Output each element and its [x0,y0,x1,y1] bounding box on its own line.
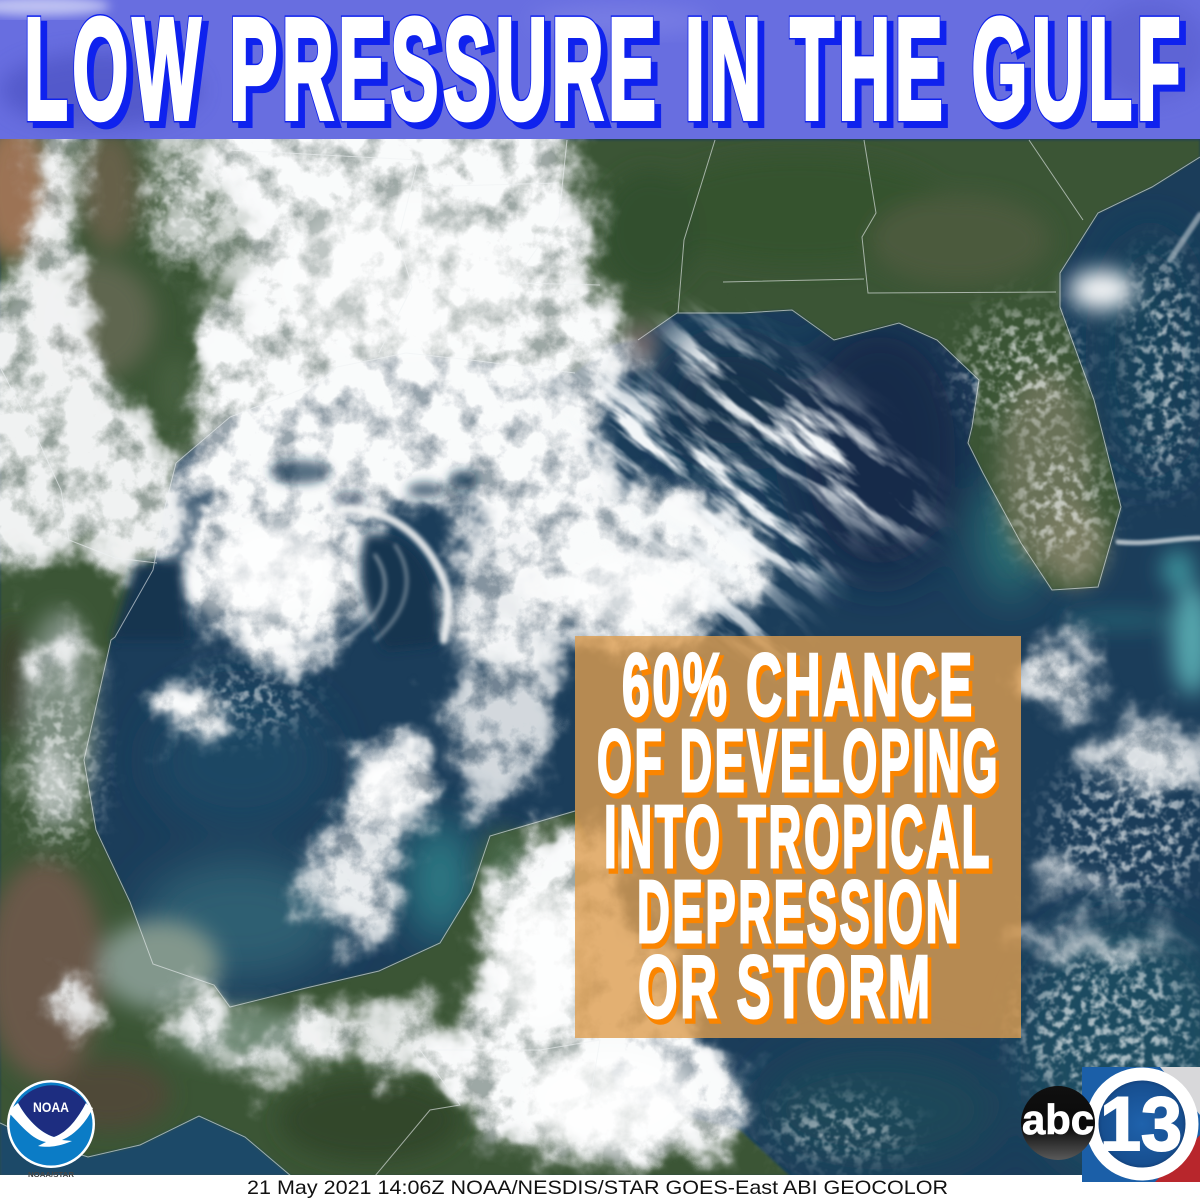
icon: NOAA logo [7,1080,95,1179]
abc circle: abc [1022,1096,1094,1143]
contrail and shallow streaks [1118,215,1200,543]
bahamas shallow water [1060,550,1200,695]
icon: NOAA logo: NOAA [33,1099,69,1115]
streaky clouds, rotated along the flow [548,299,948,662]
title banner [0,0,1200,155]
callout text: OR STORM [638,937,933,1036]
pacific ocean corner [0,1116,291,1176]
callout shadow text: OR STORM [641,941,936,1040]
icon: NOAA logo: NOAA/STAR [28,1170,75,1179]
caption bar [0,1175,1200,1200]
callout text [597,635,1000,1036]
storm dark centre and dark gaps [112,460,477,650]
callout shadow text [600,639,1003,1040]
abc circle [1021,1086,1095,1160]
ocean tone variations [133,325,1200,1159]
bright cloud peaks [215,200,1135,1150]
caption bar: 21 May 2021 14:06Z NOAA/NESDIS/STAR GOES-East ABI GEOCOLOR [247,1177,948,1199]
callout: development chance [575,635,1021,1040]
land tone variations [0,120,1105,1162]
storm spiral bands and bright core [340,510,448,640]
icon: abc13 logo [1021,1067,1200,1182]
13 block [1082,1067,1200,1182]
13 block: 13 [1100,1082,1182,1167]
